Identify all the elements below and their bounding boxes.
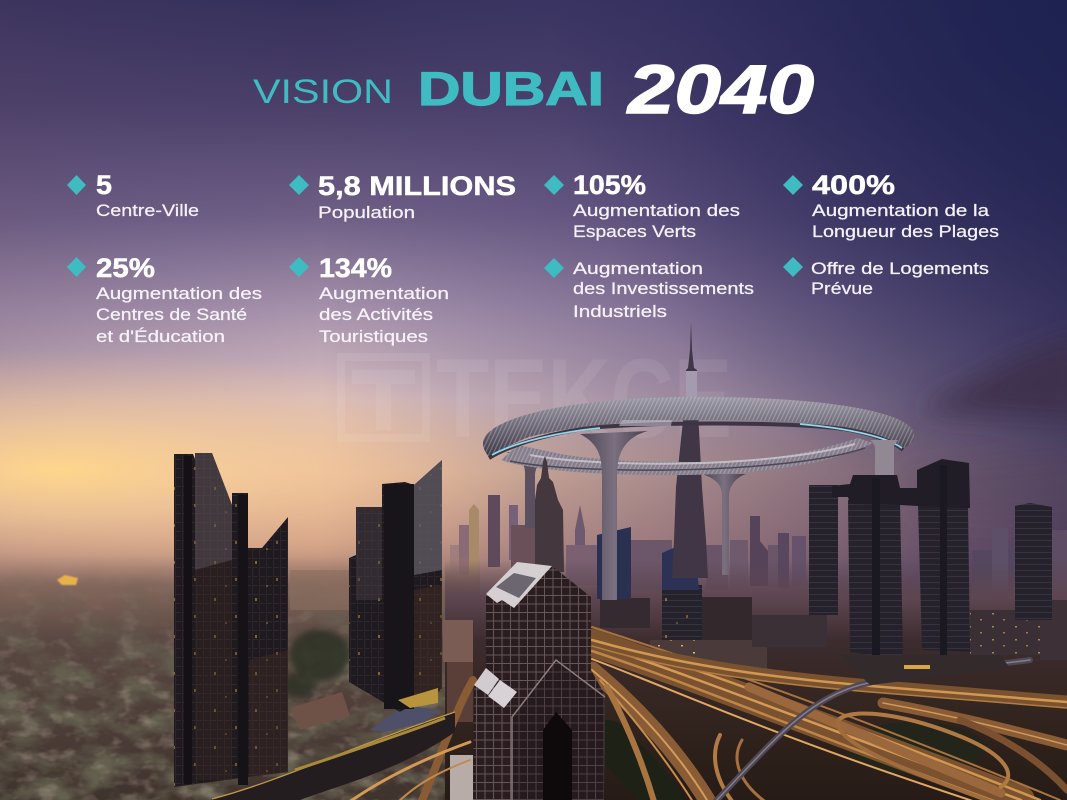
stat: 400% beach length: Longueur des Plages	[812, 222, 999, 241]
stat: 25% health and education	[67, 253, 262, 346]
stat: industrial investment	[544, 258, 754, 321]
stat: 5,8 millions population: 5,8 MILLIONS	[318, 171, 516, 201]
stat: 134% tourism: des Activités	[319, 305, 433, 324]
back-left support column	[506, 452, 556, 528]
stat: 400% beach length	[783, 170, 999, 241]
stat: 400% beach length: Augmentation de la	[812, 201, 990, 220]
green ring: structure behind towers	[483, 322, 914, 600]
stat: 134% tourism: Augmentation	[319, 284, 449, 303]
tower behind ring, left	[535, 456, 564, 572]
stat: 25% health and education: et d'Éducation	[96, 327, 225, 346]
curved podium building	[210, 705, 455, 800]
mid-rise blocks	[443, 527, 1067, 800]
title	[253, 51, 814, 128]
front left support column	[580, 431, 648, 600]
stat: planned housing	[783, 257, 989, 298]
stat: 134% tourism: Touristiques	[319, 327, 428, 346]
tower group B, centre-left	[349, 460, 442, 712]
stat: industrial investment: des Investissements	[573, 279, 754, 298]
dark smoke cloud, right	[900, 330, 1067, 520]
stat: industrial investment: Augmentation	[573, 259, 703, 278]
watermark: TEKCE	[337, 336, 732, 461]
twin towers with bridge, right	[809, 459, 1052, 685]
foreground diamond-top tower	[473, 562, 605, 800]
ground: interchange area, right	[445, 560, 1067, 800]
stat: 25% health and education: Augmentation des	[96, 284, 262, 303]
lower platform	[501, 438, 873, 475]
stat: 400% beach length: 400%	[812, 170, 895, 200]
upper ribbed ring	[483, 397, 914, 457]
stat: 105% green spaces: 105%	[573, 170, 646, 200]
stat: 134% tourism: 134%	[319, 253, 392, 283]
title: DUBAI	[418, 62, 604, 115]
title: 2040	[626, 51, 814, 128]
stat: 5,8 millions population	[289, 171, 516, 222]
stat: 5 Centre-Ville	[67, 170, 199, 220]
stat: 25% health and education: Centres de Santé	[96, 305, 247, 324]
stat: 25% health and education: 25%	[96, 253, 155, 283]
back-centre support column	[702, 474, 746, 575]
watermark: TEKCE: TEKCE	[436, 336, 732, 461]
stat: 105% green spaces: Espaces Verts	[573, 222, 696, 241]
road network	[345, 627, 1067, 800]
ground: old city, left	[0, 555, 480, 800]
Burj Khalifa tower	[672, 322, 708, 578]
stat: 5 Centre-Ville: 5	[96, 170, 112, 200]
stat: industrial investment: Industriels	[573, 302, 667, 321]
stat: 5 Centre-Ville: Centre-Ville	[96, 201, 199, 220]
stat: planned housing: Offre de Logements	[811, 259, 989, 278]
title: VISION	[253, 73, 393, 111]
stat: planned housing: Prévue	[811, 279, 873, 298]
stat: 105% green spaces: Augmentation des	[573, 201, 740, 220]
stat: 134% tourism	[289, 253, 449, 346]
stat: 105% green spaces	[544, 170, 740, 241]
stat: 5,8 millions population: Population	[318, 203, 415, 222]
tower group A, left	[174, 453, 288, 787]
right support column	[870, 440, 898, 476]
distant skyline	[450, 495, 1067, 610]
